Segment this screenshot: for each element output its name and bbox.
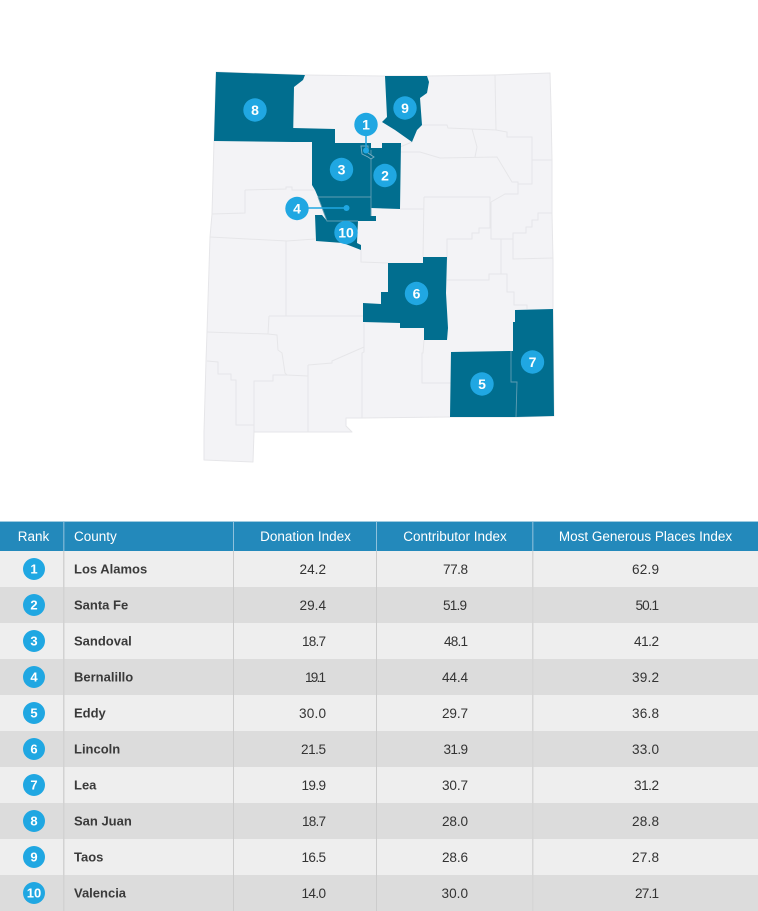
row 1: Los Alamos: 62.9 <box>632 562 659 577</box>
row 3: Sandoval: 18.7 <box>302 634 326 649</box>
county: Los Alamos <box>361 146 374 159</box>
county: San Juan <box>214 72 305 142</box>
row 10: Valencia: 14.0 <box>302 886 326 901</box>
row 9: Taos: 9 <box>30 850 38 864</box>
row 9: Taos: 27.8 <box>632 850 659 865</box>
row 8: San Juan: 28.0 <box>442 814 468 829</box>
row 10: Valencia: Valencia <box>74 886 127 900</box>
row 8: San Juan: 8 <box>30 814 38 828</box>
row 4: Bernalillo: 4 <box>30 670 38 684</box>
row 9: Taos: 28.6 <box>442 850 468 865</box>
row 6: Lincoln: 31.9 <box>444 742 468 757</box>
row 6: Lincoln: 33.0 <box>632 742 659 757</box>
row 6: Lincoln: 21.5 <box>301 742 326 757</box>
row 3: Sandoval: 41.2 <box>634 634 659 649</box>
row 4: Bernalillo: Bernalillo <box>74 670 133 684</box>
row 5: Eddy: 29.7 <box>442 706 468 721</box>
row 4: Bernalillo <box>23 666 659 688</box>
map badge 4: 4 <box>293 200 301 216</box>
map badge 2 <box>373 164 397 187</box>
map badge 1 <box>354 113 378 136</box>
row 10: Valencia: 30.0 <box>442 886 468 901</box>
row 4: Bernalillo: 19.1 <box>305 670 326 685</box>
county: Taos <box>382 76 429 142</box>
county: Eddy <box>450 351 517 417</box>
row 7: Lea: 7 <box>30 778 38 792</box>
row backgrounds and column dividers <box>0 551 758 911</box>
map badge 9: 9 <box>401 100 409 116</box>
county: Valencia <box>315 215 361 250</box>
row 3: Sandoval <box>23 630 659 652</box>
map badge 6 <box>405 282 428 305</box>
map badge 8: 8 <box>251 102 259 118</box>
row 10: Valencia: 27.1 <box>635 886 659 901</box>
row 2: Santa Fe: 51.9 <box>443 598 467 613</box>
row 1: Los Alamos: Los Alamos <box>74 562 147 576</box>
row 2: Santa Fe: Santa Fe <box>74 598 128 612</box>
map badge 6: 6 <box>413 286 421 302</box>
county: Lincoln <box>363 257 448 340</box>
map badge 1: 1 <box>362 116 370 132</box>
internal dark county borders <box>318 150 517 417</box>
row 6: Lincoln: 6 <box>30 742 38 756</box>
row 6: Lincoln: Lincoln <box>74 742 120 756</box>
row 7: Lea <box>23 774 659 796</box>
map badge 3 <box>330 158 353 181</box>
row 6: Lincoln <box>23 738 659 760</box>
table <box>0 521 758 911</box>
map badge 3: 3 <box>338 162 346 178</box>
row 1: Los Alamos <box>23 558 659 580</box>
row 5: Eddy: 30.0 <box>299 706 326 721</box>
row 3: Sandoval: 3 <box>30 634 38 648</box>
map badge 10: 10 <box>338 224 354 240</box>
row 8: San Juan: 18.7 <box>302 814 326 829</box>
state base shape <box>204 72 554 462</box>
row 8: San Juan: San Juan <box>74 814 132 828</box>
map badge 7 <box>521 350 544 374</box>
row 9: Taos: 16.5 <box>302 850 326 865</box>
row 9: Taos <box>23 846 659 868</box>
row 1: Los Alamos: 1 <box>30 562 38 576</box>
row 4: Bernalillo: 44.4 <box>442 670 468 685</box>
row 9: Taos: Taos <box>74 850 103 864</box>
row 4: Bernalillo: 39.2 <box>632 670 659 685</box>
county: Santa Fe <box>371 143 401 209</box>
row 5: Eddy: 36.8 <box>632 706 659 721</box>
row 8: San Juan <box>23 810 659 832</box>
map badge 5: 5 <box>478 376 486 392</box>
county boundaries <box>207 75 553 432</box>
row 5: Eddy: 5 <box>30 706 38 720</box>
row 2: Santa Fe: 50.1 <box>636 598 659 613</box>
leader line: rank 1 <box>363 124 369 154</box>
row 2: Santa Fe: 29.4 <box>300 598 326 613</box>
row 10: Valencia <box>23 882 659 904</box>
map badge 2: 2 <box>381 168 389 184</box>
leader line: rank 4 <box>297 205 350 211</box>
row 2: Santa Fe <box>23 594 659 616</box>
table header: Most Generous Places Index <box>559 529 732 544</box>
row 10: Valencia: 10 <box>27 886 41 900</box>
map badge 9 <box>393 96 417 120</box>
row 5: Eddy <box>23 702 659 724</box>
row 7: Lea: Lea <box>74 778 97 792</box>
row 3: Sandoval: Sandoval <box>74 634 132 648</box>
table header: Donation Index <box>260 529 351 544</box>
table header <box>0 521 758 551</box>
county: Sandoval <box>293 128 371 197</box>
county: Lea <box>511 309 554 417</box>
map badge 4 <box>285 197 309 220</box>
row 7: Lea: 30.7 <box>442 778 468 793</box>
row 1: Los Alamos: 24.2 <box>300 562 326 577</box>
row 7: Lea: 19.9 <box>302 778 326 793</box>
row 7: Lea: 31.2 <box>634 778 659 793</box>
map badge 10 <box>334 221 358 244</box>
row 3: Sandoval: 48.1 <box>444 634 468 649</box>
map badge 5 <box>470 372 494 396</box>
map badge 7: 7 <box>529 354 537 370</box>
table header: Contributor Index <box>403 529 507 544</box>
row 8: San Juan: 28.8 <box>632 814 659 829</box>
table header: Rank <box>18 529 50 544</box>
map badge 8 <box>243 98 267 122</box>
county: Bernalillo <box>318 197 376 221</box>
row 5: Eddy: Eddy <box>74 706 107 720</box>
map: New Mexico counties <box>204 72 554 462</box>
row 1: Los Alamos: 77.8 <box>443 562 468 577</box>
table header: County <box>74 529 117 544</box>
row 2: Santa Fe: 2 <box>30 598 38 612</box>
